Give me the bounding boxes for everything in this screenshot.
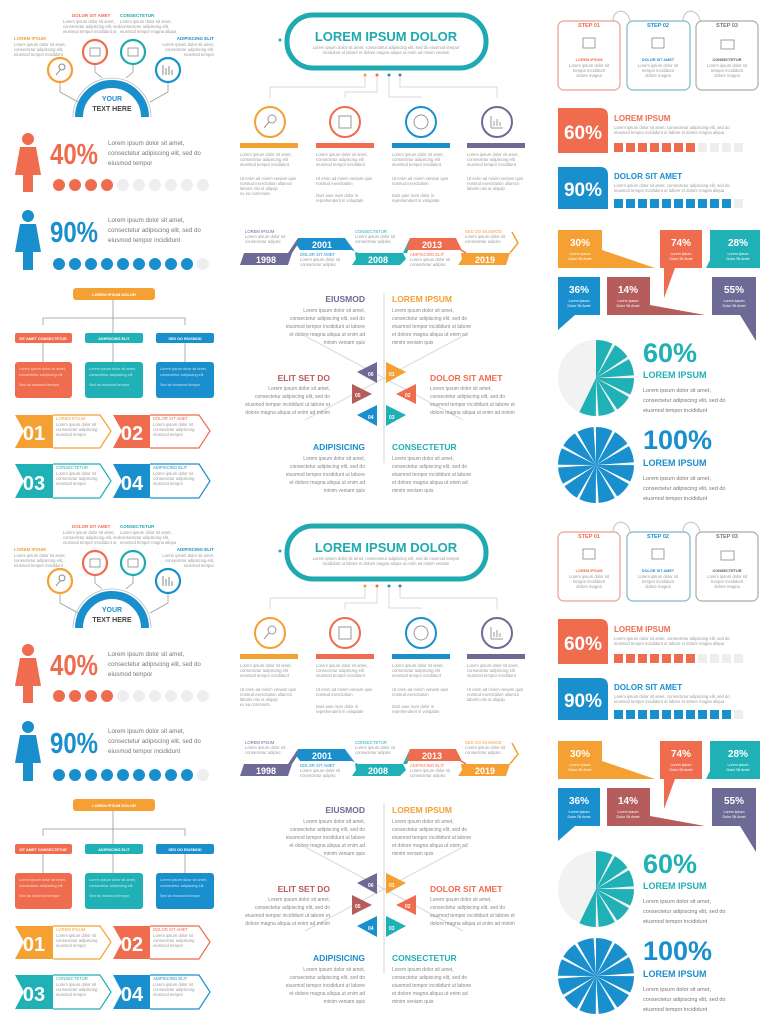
panel: timeline: Lorem ipsum dolor sit bbox=[355, 234, 396, 239]
panel: hexagon six-step: Lorem ipsum dolor sit amet, bbox=[392, 308, 454, 314]
panel: female 90%: consectetur adipiscing elit, sed do bbox=[108, 227, 201, 234]
panel: hexagon six-step: consectetur adipiscing elit, sed do bbox=[255, 394, 330, 400]
panel: callouts: Dolor Sit Amet bbox=[670, 257, 692, 261]
panel: numbered arrows: eiusmod tempor bbox=[153, 432, 184, 437]
chart: pie 100%: 100% bbox=[643, 425, 712, 455]
panel: hexagon six-step: minim veniam quis bbox=[324, 488, 365, 494]
panel: four circles with columns: Ut enim ad minim veniam quis bbox=[316, 176, 372, 181]
panel: four circles with columns: ex ea commodo bbox=[240, 191, 270, 196]
panel: callouts: Lorem Ipsum bbox=[618, 299, 638, 303]
panel: org chart: Lorem ipsum dolor sit amet, bbox=[160, 367, 207, 371]
panel: semicircle hub: consectetur adipiscing elit, bbox=[14, 47, 63, 52]
panel: org chart: SIT AMET CONSECTETUR bbox=[19, 337, 67, 341]
panel: callouts: 28% bbox=[728, 238, 748, 249]
panel: semicircle hub: CONSECTETUR bbox=[120, 13, 155, 18]
panel: org chart: ADIPISCING ELIT bbox=[98, 337, 130, 341]
panel: female 90%: Lorem ipsum dolor sit amet, bbox=[108, 217, 185, 224]
panel: steps: STEP 02 bbox=[647, 23, 669, 29]
panel: steps: dolore magna bbox=[714, 73, 740, 78]
panel: timeline: consectetur adipisc bbox=[355, 239, 391, 244]
panel: numbered arrows: eiusmod tempor bbox=[153, 481, 184, 486]
chart: pie 60%: Lorem ipsum dolor sit amet, bbox=[643, 388, 711, 394]
panel: four circles with columns: laboris nisi ut aliquip bbox=[240, 186, 278, 191]
panel: hexagon six-step: et dolore magna aliqua ut enim ad bbox=[289, 480, 365, 486]
panel: callouts: 74% bbox=[671, 238, 691, 249]
panel: semicircle hub: DOLOR SIT AMET bbox=[72, 13, 111, 18]
panel: semicircle hub: eiusmod tempor bbox=[184, 52, 215, 57]
panel: callouts: Dolor Sit Amet bbox=[569, 257, 591, 261]
icon: woman blue bbox=[15, 210, 41, 270]
panel: four circles with columns: reprehenderit in voluptate bbox=[316, 198, 364, 203]
panel: four circles with columns: Ut enim ad minim veniam quis bbox=[467, 176, 523, 181]
chart: pie 60%: LOREM IPSUM bbox=[643, 370, 707, 380]
panel: four circles with columns: consectetur adipiscing elit bbox=[316, 157, 365, 162]
panel: hexagon six-step: et dolore magna aliqua ut enim ad bbox=[392, 332, 468, 338]
half: bottom infographic set (repeat) bbox=[14, 522, 760, 1013]
panel: timeline: 2019 bbox=[475, 255, 495, 265]
panel: numbered arrows: consectetur adipiscing bbox=[153, 427, 195, 432]
panel: female 40% bbox=[15, 133, 209, 192]
chart: pie 100% bbox=[577, 425, 726, 502]
panel: steps: tempor incididunt bbox=[573, 68, 606, 73]
panel: four circles with columns: Lorem ipsum dolor sit amet, bbox=[316, 152, 368, 157]
chart: pie 100%: Lorem ipsum dolor sit amet, bbox=[643, 476, 711, 482]
panel: 60% bar bbox=[558, 108, 743, 153]
panel: org chart: SED DO EIUSMOD bbox=[168, 337, 202, 341]
panel: hexagon six-step: 06 bbox=[368, 372, 374, 378]
panel: hexagon six-step: ELIT SET DO bbox=[278, 373, 330, 383]
panel: timeline: Lorem ipsum dolor sit bbox=[300, 257, 341, 262]
panel: hexagon six-step: eiusmod tempor incididunt ut labore bbox=[392, 472, 471, 478]
panel: numbered arrows: Lorem ipsum dolor sit bbox=[56, 422, 97, 427]
panel: timeline: LOREM IPSUM bbox=[245, 229, 275, 234]
panel: four circles with columns: Lorem ipsum dolor sit amet, bbox=[392, 152, 444, 157]
panel: 60% bar: Lorem ipsum dolor sit amet, consectetur adipiscing elit, sed do bbox=[614, 125, 730, 130]
panel: org chart: consectetur adipiscing elit bbox=[160, 373, 204, 377]
panel: timeline: DOLOR SIT AMET bbox=[300, 252, 335, 257]
panel: semicircle hub: consectetur adipiscing elit, bbox=[120, 24, 169, 29]
panel: hexagon six-step: 01 bbox=[389, 372, 395, 378]
panel: callouts: Lorem Ipsum bbox=[728, 252, 748, 256]
panel: title pill: LOREM IPSUM DOLOR bbox=[315, 29, 458, 44]
panel: hexagon six-step: LOREM IPSUM bbox=[392, 294, 452, 304]
panel: numbered arrows: Lorem ipsum dolor sit bbox=[153, 422, 194, 427]
panel: callouts: 14% bbox=[618, 285, 638, 296]
panel: hexagon six-step: eiusmod tempor incididunt ut labore et bbox=[430, 402, 515, 408]
panel: 90% bar bbox=[558, 167, 743, 209]
panel: four circles with columns: consectetur adipiscing elit bbox=[240, 157, 289, 162]
panel: hexagon six-step: Lorem ipsum dolor sit amet, bbox=[392, 456, 454, 462]
panel: hexagon six-step: consectetur adipiscing elit, sed do bbox=[290, 316, 365, 322]
panel: hexagon six-step: consectetur adipiscing elit, sed do bbox=[392, 316, 467, 322]
panel: four circles with columns: consectetur adipiscing elit bbox=[392, 157, 441, 162]
panel: hexagon six-step: minim veniam quis bbox=[392, 340, 434, 346]
panel: org chart: Lorem ipsum dolor sit amet, bbox=[89, 367, 136, 371]
panel: steps: tempor incididunt bbox=[711, 68, 744, 73]
panel: callouts: Lorem Ipsum bbox=[570, 252, 590, 256]
panel: hexagon six-step: 04 bbox=[368, 415, 374, 421]
icon: woman orange bbox=[15, 133, 41, 192]
panel: timeline: consectetur adipisc bbox=[300, 262, 336, 267]
panel: steps: Lorem ipsum dolor sit bbox=[638, 63, 679, 68]
panel: timeline: Lorem ipsum dolor sit bbox=[410, 257, 451, 262]
panel: steps: LOREM IPSUM bbox=[576, 58, 602, 62]
panel: four circles with columns: nostrud exercitation ullamco bbox=[240, 181, 293, 186]
panel: hexagon six-step: 02 bbox=[405, 393, 411, 399]
panel: callouts: Dolor Sit Amet bbox=[723, 304, 745, 308]
panel: numbered arrows: 04 bbox=[121, 473, 144, 495]
panel: steps: tempor incididunt bbox=[642, 68, 675, 73]
panel: four circles with columns: eiusmod tempor incididunt bbox=[240, 162, 290, 167]
panel: numbered arrows: eiusmod tempor bbox=[56, 432, 87, 437]
chart: pie 60%: 60% bbox=[643, 338, 697, 368]
panel: timeline: consectetur adipisc bbox=[245, 239, 281, 244]
panel: female 40%: 40% bbox=[50, 139, 98, 171]
panel: four circles with columns: Duis aute irure dolor in bbox=[392, 193, 435, 198]
panel: timeline: 2013 bbox=[422, 240, 442, 250]
panel: timeline: ADIPISCING ELIT bbox=[410, 252, 445, 257]
panel: four circles with columns: Ut enim ad minim veniam quis bbox=[392, 176, 448, 181]
panel: four circles with columns: Lorem ipsum dolor sit amet, bbox=[240, 152, 292, 157]
panel: callouts: 30% bbox=[570, 238, 590, 249]
panel: steps: DOLOR SIT AMET bbox=[642, 58, 675, 62]
panel: semicircle hub: ADIPISCING ELIT bbox=[177, 36, 214, 41]
panel: semicircle hub: consectetur adipiscing elit, bbox=[165, 47, 214, 52]
panel: org chart bbox=[15, 288, 214, 398]
panel: semicircle hub: eiusmod tempor incididunt bbox=[14, 52, 64, 57]
panel: numbered arrows: consectetur adipiscing bbox=[56, 427, 98, 432]
panel: steps: dolore magna bbox=[576, 73, 602, 78]
panel: callouts: 36% bbox=[569, 285, 589, 296]
panel: semicircle hub: YOUR bbox=[102, 96, 122, 103]
panel: 90% bar: 90% bbox=[564, 180, 602, 201]
panel: hexagon six-step: minim veniam quis bbox=[392, 488, 434, 494]
panel: timeline: consectetur adipisc bbox=[410, 262, 446, 267]
panel: steps: Lorem ipsum dolor sit bbox=[707, 63, 748, 68]
panel: steps: dolore magna bbox=[645, 73, 671, 78]
panel: org chart: consectetur adipiscing elit bbox=[89, 373, 133, 377]
panel: four circles with columns: nostrud exercitation bbox=[316, 181, 353, 186]
panel: four circles with columns: laboris nisi ut aliquip bbox=[467, 186, 505, 191]
panel: timeline: Lorem ipsum dolor sit bbox=[465, 234, 506, 239]
panel: hexagon six-step: Lorem ipsum dolor sit amet, bbox=[303, 456, 365, 462]
panel: four circles with columns bbox=[240, 74, 525, 203]
panel: four circles with columns: reprehenderit in voluptate bbox=[392, 198, 440, 203]
panel: steps bbox=[558, 11, 758, 90]
panel: steps: STEP 01 bbox=[578, 23, 600, 29]
panel: semicircle hub: Lorem ipsum dolor sit amet, bbox=[162, 42, 214, 47]
panel: title pill: Lorem ipsum dolor sit amet, consectetur adipiscing elit, sed do eiusmod tempor bbox=[313, 45, 460, 50]
panel: semicircle hub: consectetur adipiscing elit, sed bbox=[63, 24, 121, 29]
panel: title pill bbox=[278, 15, 488, 68]
panel: hexagon six-step: Lorem ipsum dolor sit amet, bbox=[430, 386, 492, 392]
panel: hexagon six-step: Lorem ipsum dolor sit amet, bbox=[303, 308, 365, 314]
chart: pie 100%: LOREM IPSUM bbox=[643, 458, 707, 468]
panel: four circles with columns: Ut enim ad minim veniam quis bbox=[240, 176, 296, 181]
panel: semicircle hub: eiusmod tempor incididunt ut bbox=[63, 29, 117, 34]
panel: female 40%: eiusmod tempor bbox=[108, 160, 152, 167]
chart: pie 60% bbox=[577, 338, 726, 414]
panel: numbered arrows: ADIPISCING ELIT bbox=[153, 465, 188, 470]
half: top infographic set bbox=[14, 11, 760, 502]
panel: hexagon six-step: consectetur adipiscing elit, sed do bbox=[392, 464, 467, 470]
panel: callouts: Lorem Ipsum bbox=[671, 252, 691, 256]
panel: callouts: Lorem Ipsum bbox=[569, 299, 589, 303]
panel: numbered arrows: DOLOR SIT AMET bbox=[153, 416, 188, 421]
panel: hexagon six-step: et dolore magna aliqua ut enim ad bbox=[289, 332, 365, 338]
panel: numbered arrows: Lorem ipsum dolor sit bbox=[56, 471, 97, 476]
panel: numbered arrows: consectetur adipiscing bbox=[56, 476, 98, 481]
panel: semicircle hub: LOREM IPSUM bbox=[14, 36, 46, 41]
panel: 60% bar: eiusmod tempor incididunt ut labore et dolore magna aliqua bbox=[614, 130, 725, 135]
panel: 90% bar: DOLOR SIT AMET bbox=[614, 172, 682, 181]
panel: hexagon six-step: consectetur adipiscing elit, sed do bbox=[290, 464, 365, 470]
panel: semicircle hub: Lorem ipsum dolor sit amet, bbox=[120, 19, 172, 24]
panel: steps: Lorem ipsum dolor sit bbox=[569, 63, 610, 68]
panel: four circles with columns: nostrud exercitation bbox=[392, 181, 429, 186]
panel: four circles with columns: eiusmod tempor incididunt bbox=[316, 162, 366, 167]
panel: four circles with columns: eiusmod tempor incididunt bbox=[467, 162, 517, 167]
panel: 60% bar: 60% bbox=[564, 123, 602, 144]
panel: hexagon six-step: DOLOR SIT AMET bbox=[430, 373, 503, 383]
panel: hexagon six-step: dolore magna aliqua ut enim ad minim bbox=[430, 410, 515, 416]
panel: hexagon six-step: consectetur adipiscing elit, sed do bbox=[430, 394, 505, 400]
panel: four circles with columns: Lorem ipsum dolor sit amet, bbox=[467, 152, 519, 157]
panel: female 90%: 90% bbox=[50, 217, 98, 249]
panel: timeline: 1998 bbox=[256, 255, 276, 265]
panel: four circles with columns: nostrud exercitation ullamco bbox=[467, 181, 520, 186]
panel: hexagon six-step bbox=[245, 293, 515, 494]
panel: timeline bbox=[240, 229, 518, 267]
panel: female 40%: consectetur adipiscing elit, sed do bbox=[108, 150, 201, 157]
panel: hexagon six-step: eiusmod tempor incididunt ut labore et bbox=[245, 402, 331, 408]
panel: four circles with columns: eiusmod tempor incididunt bbox=[392, 162, 442, 167]
panel: hexagon six-step: eiusmod tempor incididunt ut labore bbox=[286, 472, 365, 478]
panel: timeline: 2008 bbox=[368, 255, 388, 265]
panel: callouts: Lorem Ipsum bbox=[724, 299, 744, 303]
panel: timeline: consectetur adipisc bbox=[465, 239, 501, 244]
panel: numbered arrows: 01 bbox=[23, 423, 45, 445]
panel: hexagon six-step: eiusmod tempor incididunt ut labore bbox=[286, 324, 365, 330]
panel: hexagon six-step: et dolore magna aliqua ut enim ad bbox=[392, 480, 468, 486]
panel: female 90%: eiusmod tempor incididunt bbox=[108, 237, 181, 244]
panel: hexagon six-step: 03 bbox=[389, 415, 395, 421]
chart: pie 100%: consectetur adipiscing elit, sed do bbox=[643, 486, 726, 492]
chart: pie 60%: consectetur adipiscing elit, sed do bbox=[643, 398, 726, 404]
panel: hexagon six-step: Lorem ipsum dolor sit amet, bbox=[268, 386, 330, 392]
panel: callouts: Dolor Sit Amet bbox=[727, 257, 749, 261]
panel: callouts: Dolor Sit Amet bbox=[617, 304, 639, 308]
panel: org chart: Sed do eiusmod tempor bbox=[89, 383, 130, 387]
panel: hexagon six-step: 05 bbox=[355, 393, 361, 399]
panel: timeline: SED DO EIUSMOD bbox=[465, 229, 502, 234]
panel: numbered arrows: LOREM IPSUM bbox=[56, 416, 86, 421]
panel: numbered arrows: consectetur adipiscing bbox=[153, 476, 195, 481]
panel: title pill: incididunt ut labore et dolore magna aliqua ut enim ad minim veniam bbox=[323, 50, 450, 55]
panel: hexagon six-step: EIUSMOD bbox=[325, 294, 365, 304]
panel: callouts: 55% bbox=[724, 285, 744, 296]
panel: semicircle hub: Lorem ipsum dolor sit amet, bbox=[63, 19, 115, 24]
panel: numbered arrows: 02 bbox=[121, 423, 143, 445]
panel: steps: CONSECTETUR bbox=[713, 58, 742, 62]
panel: org chart: LOREM IPSUM DOLOR bbox=[92, 292, 136, 297]
panel: hexagon six-step: ADIPISICING bbox=[313, 442, 365, 452]
panel: hexagon six-step: CONSECTETUR bbox=[392, 442, 457, 452]
panel: numbered arrows bbox=[15, 415, 210, 498]
panel: semicircle hub: eiusmod tempor magna aliqua bbox=[120, 29, 177, 34]
panel: female 40%: Lorem ipsum dolor sit amet, bbox=[108, 140, 185, 147]
panel: timeline: 2001 bbox=[312, 240, 332, 250]
panel: semicircle hub bbox=[14, 13, 215, 117]
panel: hexagon six-step: eiusmod tempor incididunt ut labore bbox=[392, 324, 471, 330]
panel: four circles with columns: Duis aute irure dolor in bbox=[316, 193, 359, 198]
panel: female 90% bbox=[15, 210, 209, 270]
panel: numbered arrows: eiusmod tempor bbox=[56, 481, 87, 486]
panel: numbered arrows: Lorem ipsum dolor sit bbox=[153, 471, 194, 476]
panel: org chart: Lorem ipsum dolor sit amet, bbox=[19, 367, 66, 371]
panel: timeline: CONSECTETUR bbox=[355, 229, 387, 234]
panel: callouts bbox=[558, 230, 760, 341]
panel: 90% bar: eiusmod tempor incididunt ut labore et dolore magna aliqua bbox=[614, 188, 725, 193]
panel: 90% bar: Lorem ipsum dolor sit amet, consectetur adipiscing elit, sed do bbox=[614, 183, 730, 188]
panel: org chart: consectetur adipiscing elit bbox=[19, 373, 63, 377]
panel: hexagon six-step: dolore magna aliqua ut enim ad minim bbox=[245, 410, 330, 416]
panel: 60% bar: LOREM IPSUM bbox=[614, 114, 671, 123]
panel: timeline: Lorem ipsum dolor sit bbox=[245, 234, 286, 239]
panel: steps: STEP 03 bbox=[716, 23, 738, 29]
panel: numbered arrows: 03 bbox=[23, 473, 45, 495]
panel: numbered arrows: CONSECTETUR bbox=[56, 465, 88, 470]
panel: semicircle hub: Lorem ipsum dolor sit amet, bbox=[14, 42, 66, 47]
chart: pie 100%: eiusmod tempor incididunt bbox=[643, 496, 708, 502]
panel: org chart: Sed do eiusmod tempor bbox=[160, 383, 201, 387]
panel: org chart: Sed do eiusmod tempor bbox=[19, 383, 60, 387]
panel: hexagon six-step: minim veniam quis bbox=[324, 340, 365, 346]
panel: four circles with columns: consectetur adipiscing elit bbox=[467, 157, 516, 162]
panel: callouts: Dolor Sit Amet bbox=[568, 304, 590, 308]
panel: semicircle hub: TEXT HERE bbox=[92, 106, 132, 113]
chart: pie 60%: eiusmod tempor incididunt bbox=[643, 408, 708, 414]
